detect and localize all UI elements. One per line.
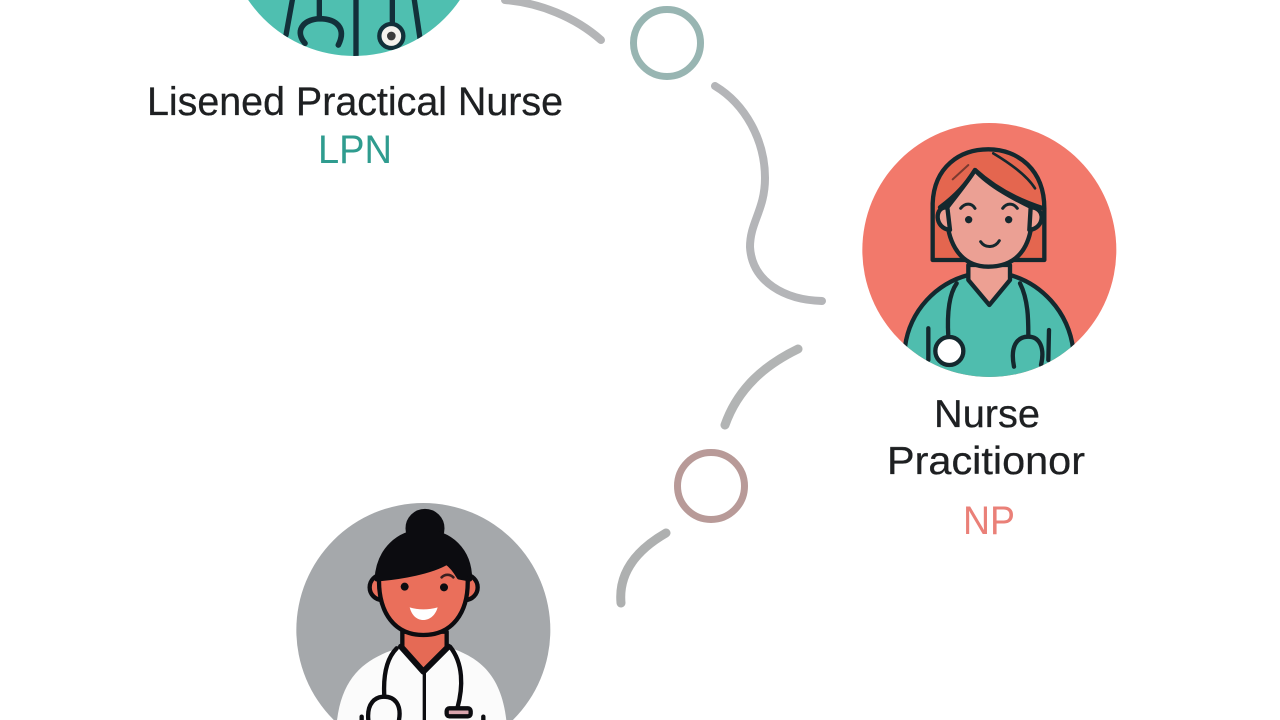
connector: first ring to NP [715, 86, 822, 301]
ring node: teal [634, 10, 700, 76]
connector: NP to second ring [725, 349, 798, 425]
label: LPN: LPN [318, 128, 392, 172]
heading: Nurse Pracitionor: Pracitionor [887, 440, 1085, 483]
heading: Nurse Pracitionor: Nurse [934, 393, 1040, 436]
icon: bottom nurse avatar [296, 503, 550, 720]
label: NP: NP [963, 499, 1015, 543]
icon: NP avatar [862, 123, 1116, 387]
connector: second ring to bottom nurse [621, 533, 666, 603]
heading: Lisened Practical Nurse: Lisened Practical Nurse [147, 80, 563, 124]
icon: LPN avatar [248, 0, 460, 56]
heading: Nurse Pracitionor [887, 393, 1085, 483]
connector: LPN to first ring [505, 0, 601, 40]
ring node: rose [678, 452, 744, 520]
